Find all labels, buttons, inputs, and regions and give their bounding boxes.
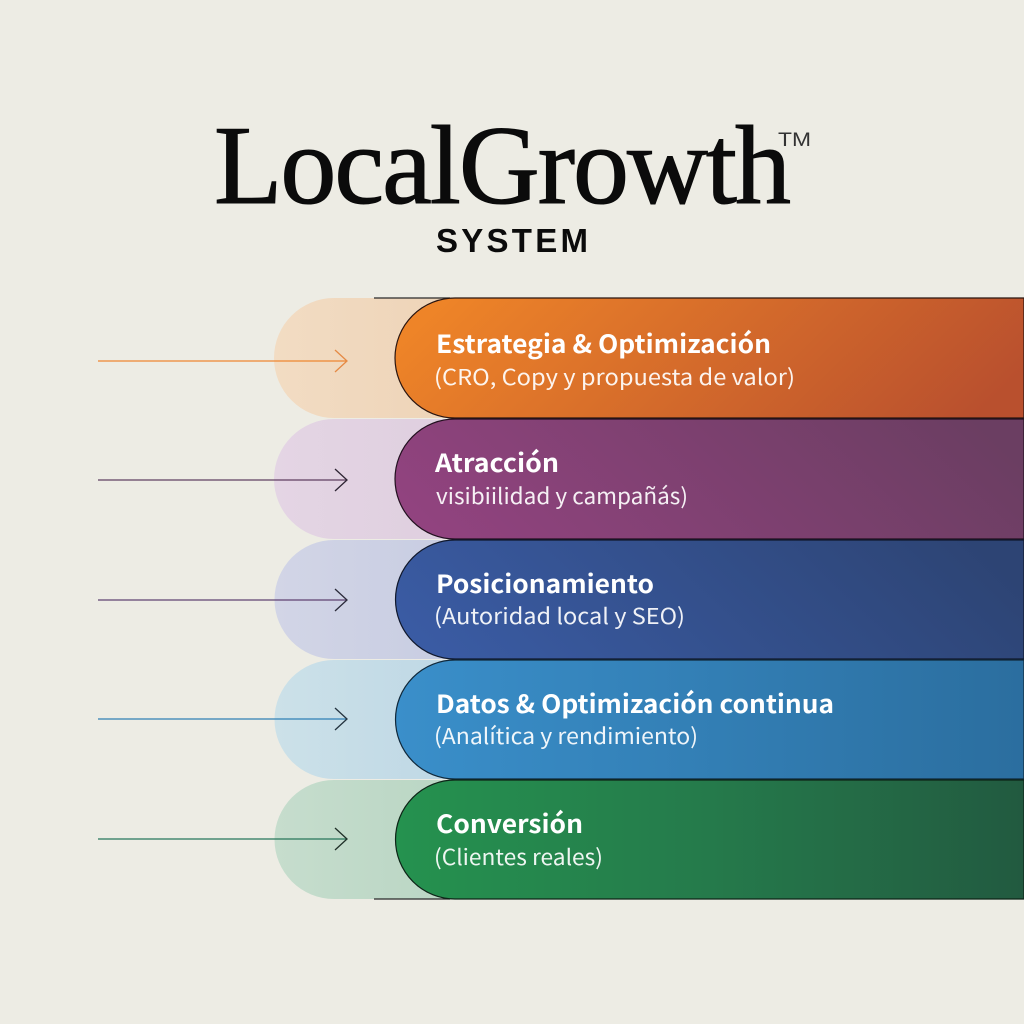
band: Conversión	[396, 780, 1024, 899]
band: Estrategia & Optimización	[395, 298, 1024, 418]
heading: Datos & Optimización continua	[436, 685, 834, 721]
description: (CRO, Copy y propuesta de valor)	[434, 360, 795, 392]
pale pill backgrounds	[274, 298, 450, 899]
arrow: orange	[98, 350, 347, 372]
heading: Atracción	[434, 444, 559, 480]
arrow: violet	[98, 589, 347, 611]
trademark mark: TM	[778, 130, 811, 151]
heading: Conversión	[436, 805, 583, 841]
band: Posicionamiento	[396, 540, 1024, 659]
band: Atracción	[395, 419, 1024, 539]
description: (Autoridad local y SEO)	[434, 599, 685, 631]
description: visibiilidad y campañás)	[436, 479, 688, 511]
heading: Posicionamiento	[436, 565, 654, 601]
description: (Analítica y rendimiento)	[434, 719, 698, 751]
top and bottom edge lines	[374, 298, 450, 899]
description: (Clientes reales)	[434, 840, 603, 872]
band: Datos & Optimización continua	[396, 660, 1024, 779]
arrow: purple	[98, 469, 347, 491]
arrow: blue	[98, 708, 347, 730]
subtitle: SYSTEM	[436, 222, 588, 259]
arrow: green	[98, 828, 347, 850]
title: LocalGrowth	[214, 104, 791, 228]
heading: Estrategia & Optimización	[436, 325, 771, 361]
